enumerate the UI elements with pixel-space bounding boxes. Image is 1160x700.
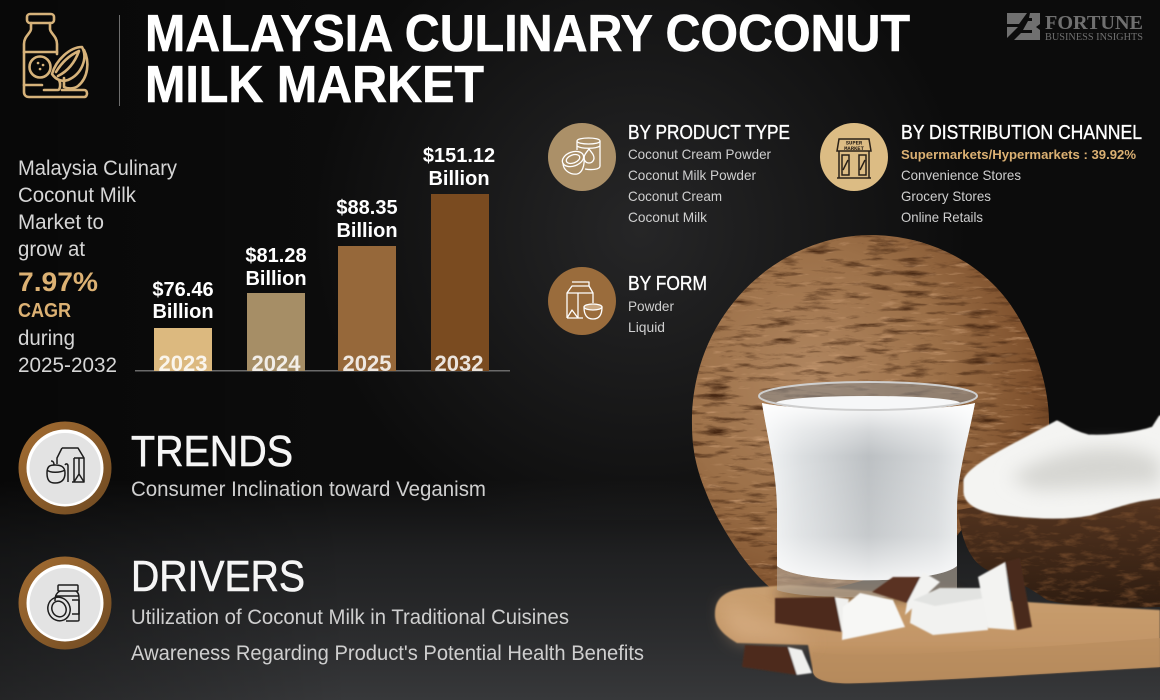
bar 2024: 2024 <box>252 351 301 376</box>
halved coconut <box>958 417 1160 608</box>
whole coconut <box>692 235 1049 600</box>
panel: by distribution channel: Supermarkets/Hypermarkets : 39.92% <box>901 147 1136 162</box>
icon: distribution channel <box>820 123 888 191</box>
panel: by product type: Coconut Milk Powder <box>628 167 756 183</box>
photo: coconuts and glass of milk <box>692 235 1160 683</box>
bar 2032 <box>423 145 495 376</box>
coconut chunks <box>742 558 1032 675</box>
panel: by distribution channel: Grocery Stores <box>901 188 991 204</box>
text block: CAGR statement: CAGR <box>18 300 71 322</box>
panel: by product type <box>628 122 790 225</box>
logo: Fortune Business Insights: FORTUNE <box>1045 12 1143 34</box>
bar chart: market size <box>135 145 510 376</box>
bar 2024: $81.28 <box>245 245 307 267</box>
header divider <box>119 15 120 106</box>
text block: CAGR statement: 2025-2032 <box>18 354 117 377</box>
icon: drivers <box>18 556 112 650</box>
panel: by product type: Coconut Cream Powder <box>628 146 771 162</box>
text block: CAGR statement: during <box>18 327 75 350</box>
panel: trends <box>131 427 486 501</box>
bar 2023: $76.46 <box>152 279 214 301</box>
icon: distribution channel: MARKET <box>844 145 865 152</box>
text block: CAGR statement: Malaysia Culinary <box>18 157 177 180</box>
bar 2032: 2032 <box>435 351 483 376</box>
panel: trends: TRENDS <box>131 427 293 476</box>
panel: by form: Liquid <box>628 319 665 335</box>
panel: drivers: Utilization of Coconut Milk in Traditional Cuisines <box>131 606 569 629</box>
text block: CAGR statement: 7.97% <box>18 267 98 297</box>
panel: trends: Consumer Inclination toward Veganism <box>131 478 486 501</box>
icon: form <box>548 267 616 335</box>
bar 2032: $151.12 <box>423 145 495 167</box>
bar 2023: 2023 <box>159 351 207 376</box>
panel: by product type: Coconut Cream <box>628 188 722 204</box>
panel: drivers <box>131 552 644 665</box>
bar 2023 <box>152 279 214 376</box>
panel: by form: Powder <box>628 298 674 314</box>
glass of milk <box>759 382 977 601</box>
title: MILK MARKET <box>145 56 484 114</box>
icon: product type <box>548 123 616 191</box>
bar 2025 <box>336 197 398 376</box>
panel: by product type: Coconut Milk <box>628 209 708 225</box>
wooden board <box>715 585 1160 683</box>
bar 2024: Billion <box>245 268 307 290</box>
icon: trends <box>18 422 112 514</box>
logo: Fortune Business Insights <box>1007 12 1143 43</box>
bar 2023: Billion <box>152 301 214 323</box>
text block: CAGR statement: grow at <box>18 238 85 261</box>
text block: CAGR statement: Market to <box>18 211 104 234</box>
bar 2025: Billion <box>336 220 398 242</box>
bar 2025: 2025 <box>343 351 391 376</box>
text block: CAGR statement: Coconut Milk <box>18 184 136 207</box>
panel: by distribution channel: Convenience Stores <box>901 167 1021 183</box>
panel: by distribution channel <box>901 122 1142 225</box>
bar 2025: $88.35 <box>336 197 398 219</box>
panel: by form <box>628 273 707 335</box>
panel: by form: BY FORM <box>628 273 707 295</box>
text block: CAGR statement <box>18 157 177 377</box>
panel: by product type: BY PRODUCT TYPE <box>628 122 790 144</box>
logo: Fortune Business Insights: BUSINESS INSIGHTS <box>1045 32 1143 43</box>
panel: drivers: Awareness Regarding Product's Potential Health Benefits <box>131 642 644 665</box>
bar 2024 <box>245 245 307 376</box>
icon: distribution channel: SUPER <box>846 140 863 146</box>
title <box>145 5 910 114</box>
bar 2032: Billion <box>428 168 490 190</box>
panel: by distribution channel: Online Retails <box>901 209 983 225</box>
title: MALAYSIA CULINARY COCONUT <box>145 5 910 63</box>
header icon: bottle and coconut <box>24 14 87 97</box>
panel: drivers: DRIVERS <box>131 552 305 601</box>
